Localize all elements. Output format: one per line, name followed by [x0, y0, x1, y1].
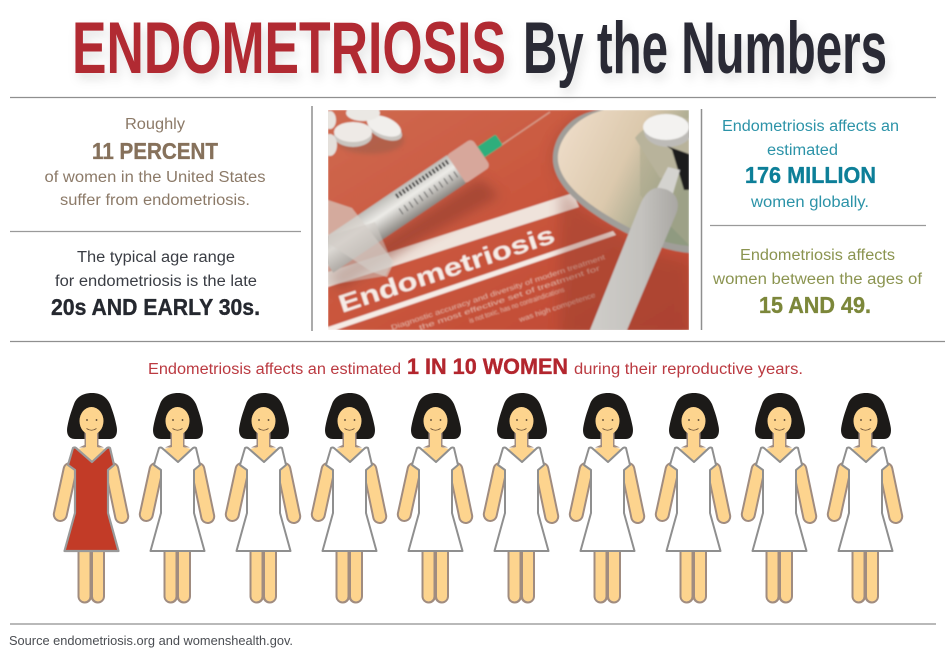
title: ENDOMETRIOSIS [72, 8, 506, 89]
small paper text: was high competence [517, 292, 597, 324]
headline: 1 in 10 women: during their reproductive years. [574, 361, 803, 378]
stat: ages 15 and 49: 15 AND 49. [759, 292, 871, 318]
stat: 11 percent: 11 PERCENT [92, 138, 218, 164]
small paper text: the most effective set of treatment for [418, 265, 602, 332]
paper heading: Endometriosis [335, 221, 558, 319]
stat: ages 15 and 49: Endometriosis affects [740, 247, 895, 264]
source note: Source endometriosis.org and womenshealth.gov. [9, 633, 293, 648]
woman 3 [223, 393, 303, 604]
woman 9 [739, 393, 819, 604]
headline: 1 in 10 women: Endometriosis affects an estimated [148, 361, 401, 378]
stat: 11 percent: of women in the United States [44, 169, 266, 186]
woman 1: red dress [51, 393, 131, 604]
headline: 1 in 10 women [148, 354, 803, 379]
pictogram: ten women [51, 393, 905, 604]
woman 7 [567, 393, 647, 604]
small paper text: is not toxic, has no contraindications [468, 287, 566, 325]
small paper text [390, 254, 606, 332]
stat: 176 million: 176 MILLION [745, 162, 876, 188]
stat: age range: The typical age range [77, 249, 235, 266]
paper bands [328, 193, 616, 330]
woman 10 [825, 393, 905, 604]
headline: 1 in 10 women: 1 IN 10 WOMEN [407, 354, 568, 379]
stat: 176 million: women globally. [750, 194, 869, 211]
stat: 176 million [722, 118, 899, 211]
woman 5 [395, 393, 475, 604]
stethoscope [551, 110, 692, 340]
pills [328, 110, 404, 157]
woman 8 [653, 393, 733, 604]
stat: ages 15 and 49 [712, 247, 923, 318]
woman 4 [309, 393, 389, 604]
stat: ages 15 and 49: women between the ages of [712, 271, 923, 288]
stat: 11 percent [44, 116, 266, 209]
stat: 11 percent: suffer from endometriosis. [60, 192, 250, 209]
stat: age range: for endometriosis is the late [55, 273, 257, 290]
stat: 176 million: Endometriosis affects an [722, 118, 899, 135]
woman 2 [137, 393, 217, 604]
stat: age range: 20s AND EARLY 30s. [51, 294, 260, 320]
syringe [314, 112, 550, 290]
stat: 176 million: estimated [767, 142, 838, 159]
small paper text: Diagnostic accuracy and diversity of modern treatment [390, 254, 606, 332]
photo: syringe, stethoscope and endometriosis paper [328, 110, 689, 330]
stat: 11 percent: Roughly [125, 116, 185, 133]
woman 6 [481, 393, 561, 604]
stat: age range [51, 249, 260, 320]
